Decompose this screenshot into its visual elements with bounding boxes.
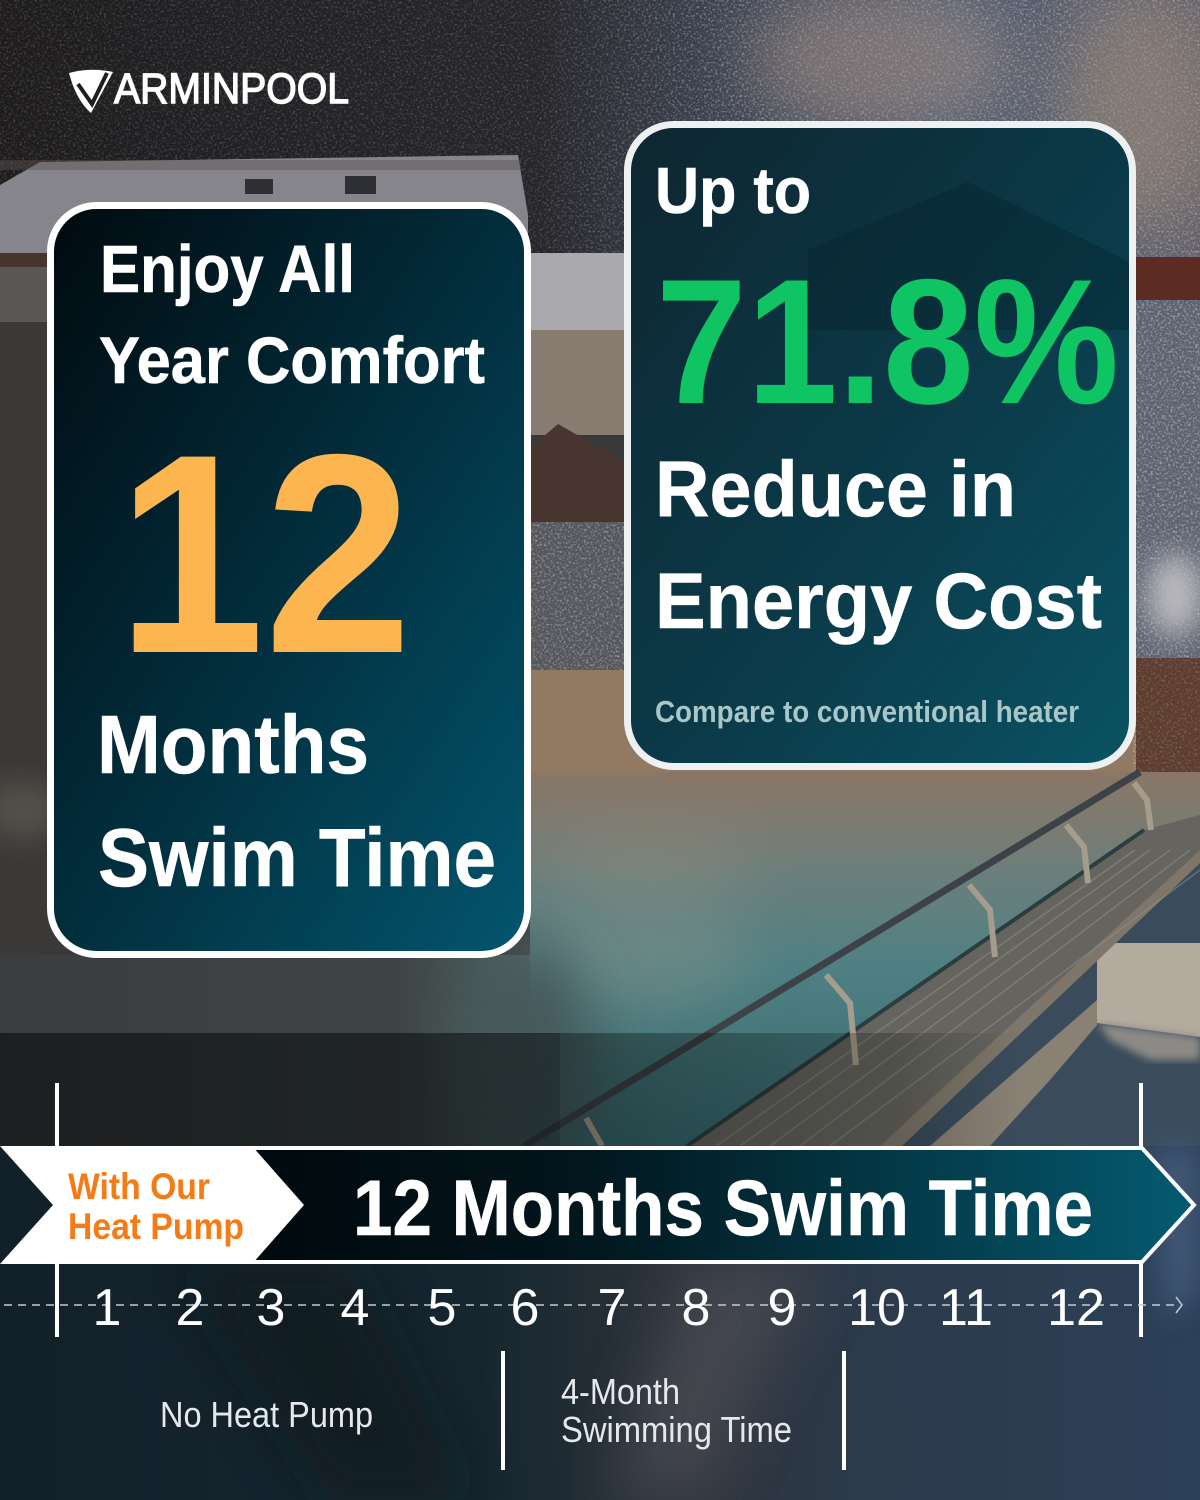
big number: 12: 12 — [117, 396, 412, 713]
dark band — [0, 1033, 1200, 1146]
arrow banner — [252, 1148, 1194, 1262]
month numbers: 2 — [176, 1279, 204, 1337]
month numbers: 7 — [598, 1279, 626, 1337]
text: reduce in energy cost: Reduce in — [655, 444, 1016, 533]
panel: energy saving — [628, 124, 1132, 766]
month numbers: 12 — [1047, 1279, 1105, 1337]
month numbers: 11 — [939, 1279, 993, 1337]
text: reduce in energy cost: Energy Cost — [655, 556, 1102, 645]
railing — [524, 772, 1151, 1146]
right side huts and snow — [1133, 280, 1200, 780]
text: up to: Up to — [655, 154, 811, 227]
lower blurred panel — [0, 1146, 1200, 1500]
icon: axis arrowhead — [1176, 1297, 1182, 1313]
label: no heat pump: No Heat Pump — [160, 1394, 373, 1435]
month numbers: 6 — [511, 1279, 539, 1337]
month numbers: 3 — [257, 1279, 285, 1337]
pool water — [530, 772, 1200, 1152]
text: reduce in energy cost — [655, 444, 1102, 645]
month numbers: 10 — [848, 1279, 906, 1337]
house roof — [0, 155, 528, 253]
heading: enjoy all year comfort: Enjoy All — [100, 232, 355, 307]
heading: enjoy all year comfort: Year Comfort — [99, 323, 485, 397]
forest and snowy tree texture — [0, 0, 1200, 257]
label: 4-month swimming time: Swimming Time — [561, 1409, 792, 1450]
label: 4-month swimming time — [561, 1371, 792, 1450]
arrow: with our heat pump: With Our — [68, 1166, 210, 1207]
big number: 71.8%: 71.8% — [656, 242, 1119, 441]
logo: Varminpool — [69, 65, 349, 113]
dividers — [503, 1351, 844, 1470]
icon: shield V mark — [69, 70, 113, 113]
right side trees — [1133, 280, 1200, 780]
banner text: 12 Months Swim Time — [353, 1163, 1093, 1252]
arrow: with our heat pump: Heat Pump — [68, 1206, 244, 1247]
text: months swim time — [97, 698, 496, 904]
right lower structures — [902, 863, 1200, 1146]
walkway — [687, 815, 1200, 1146]
month numbers: 9 — [768, 1279, 796, 1337]
text: months swim time: Months — [97, 698, 369, 791]
month numbers: 1 — [93, 1279, 121, 1337]
dashed month axis — [4, 1304, 1180, 1306]
label: 4-month swimming time: 4-Month — [561, 1371, 680, 1412]
text: months swim time: Swim Time — [98, 811, 496, 904]
timeline — [0, 1083, 1194, 1470]
month numbers: 4 — [341, 1279, 369, 1337]
start and end ticks — [57, 1083, 1141, 1337]
panel: all year comfort — [50, 206, 528, 954]
arrow: with our heat pump — [0, 1146, 304, 1264]
wordmark: ARMINPOOL — [114, 65, 349, 113]
faint house through panel — [808, 182, 1129, 330]
month numbers: 5 — [428, 1279, 456, 1337]
month numbers — [93, 1279, 1105, 1337]
mid buildings — [528, 253, 628, 331]
heading: enjoy all year comfort — [99, 232, 485, 397]
footnote: Compare to conventional heater — [655, 694, 1079, 729]
month numbers: 8 — [682, 1279, 710, 1337]
